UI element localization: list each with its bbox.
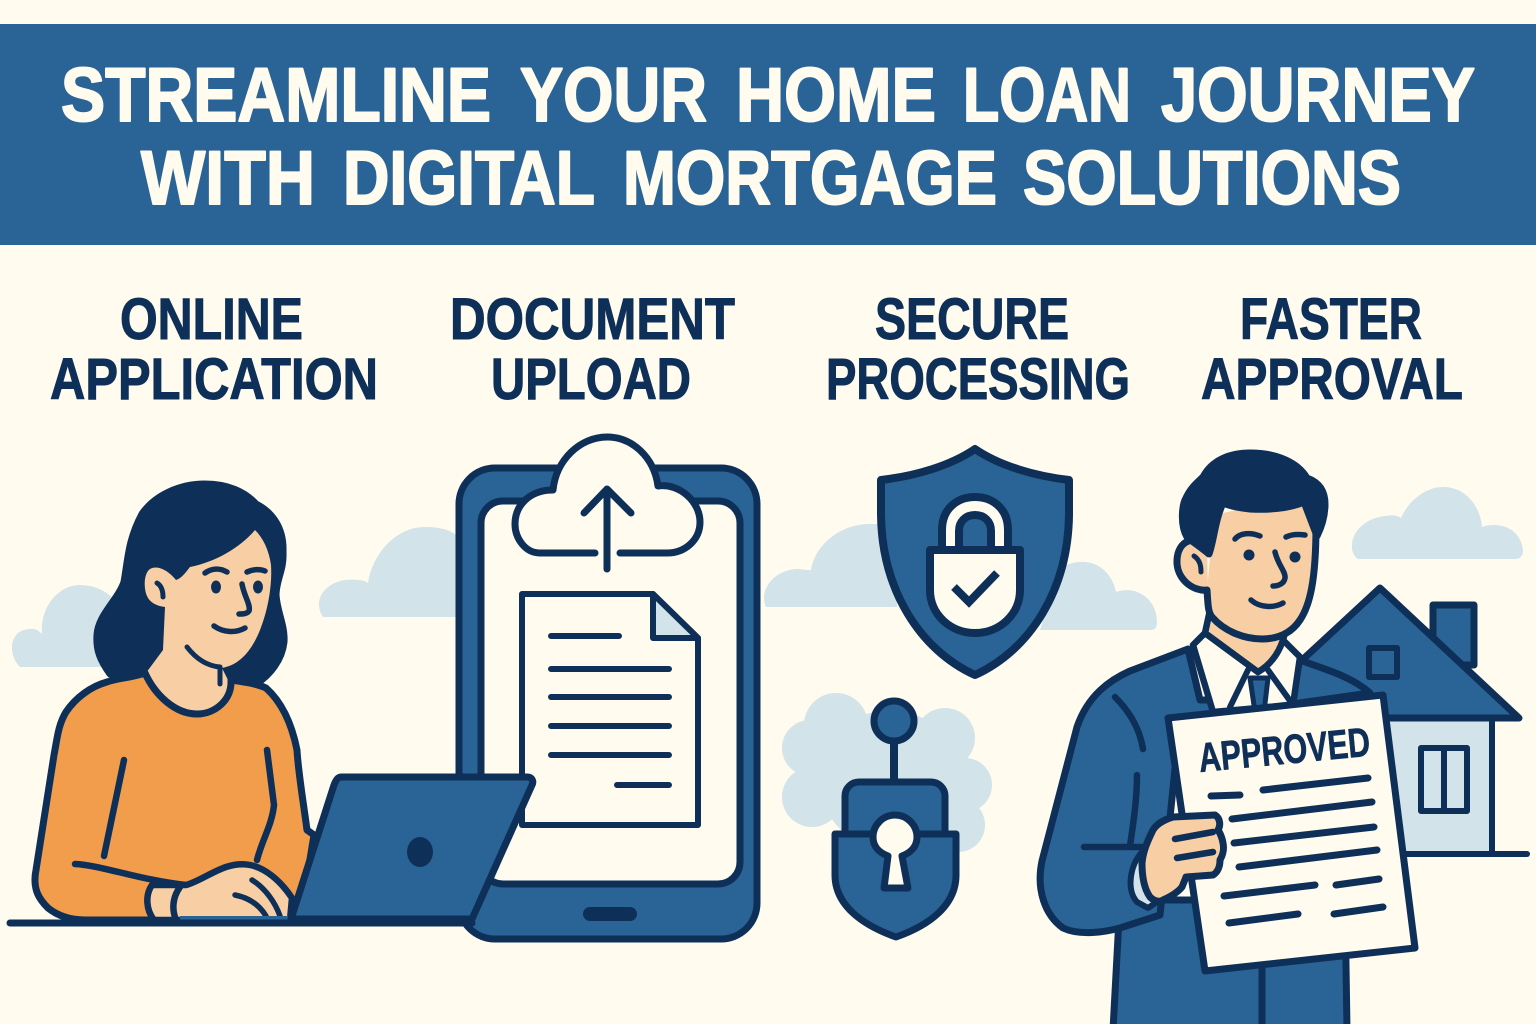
eyes (211, 580, 221, 594)
approved paper (1168, 695, 1415, 971)
facial lines (1235, 534, 1305, 606)
document (522, 594, 698, 825)
heading: faster approval: FASTER (1240, 287, 1422, 352)
cuff and hand (147, 864, 292, 920)
jaw line (187, 647, 220, 684)
heading: document upload (450, 287, 735, 412)
tablet screen (481, 501, 740, 884)
illustration: businessman with approved paper (1040, 453, 1415, 1024)
lower shield (835, 834, 956, 937)
check mark (954, 573, 997, 602)
title banner: JOURNEY (1161, 53, 1475, 138)
title banner: WITH (141, 136, 315, 221)
hair (97, 484, 284, 684)
title banner: YOUR (520, 53, 707, 138)
heading: faster approval: APPROVAL (1201, 347, 1463, 412)
face and neck (145, 530, 271, 714)
facial lines (205, 569, 265, 632)
shield (881, 449, 1069, 675)
table edge (10, 920, 472, 926)
laptop logo (407, 837, 433, 867)
heading: online application: APPLICATION (50, 347, 378, 412)
title banner: DIGITAL (343, 136, 595, 221)
roof (1300, 588, 1519, 718)
illustration: house (1300, 588, 1527, 854)
title banner: STREAMLINE (61, 53, 491, 138)
ground line (1395, 851, 1527, 857)
wall (1340, 717, 1492, 854)
heading: document upload: DOCUMENT (450, 287, 735, 352)
torso (1113, 900, 1347, 1024)
shirt collar (1193, 633, 1300, 712)
heading: secure processing (826, 287, 1130, 412)
icon: tablet with cloud upload and document (459, 437, 757, 939)
chimney (1433, 605, 1474, 665)
face fill (1207, 495, 1316, 639)
title banner (0, 24, 1536, 245)
icon: large shield with padlock (881, 449, 1069, 675)
home button (583, 907, 637, 921)
heading: document upload: UPLOAD (491, 347, 691, 412)
heading: faster approval (1201, 287, 1463, 412)
finger lines (1175, 832, 1213, 858)
face outline (1207, 525, 1316, 639)
icon: shield with keyhole (835, 701, 956, 937)
padlock body (930, 550, 1020, 633)
approved stamp text: APPROVED (1196, 719, 1372, 781)
title banner: SOLUTIONS (1023, 136, 1401, 221)
heading: secure processing: SECURE (875, 287, 1069, 352)
ear (1177, 540, 1208, 590)
eyes (1244, 550, 1254, 560)
wall window (1421, 748, 1467, 811)
tie (1250, 678, 1268, 712)
illustration: woman at laptop (10, 484, 533, 923)
heading: secure processing: PROCESSING (826, 347, 1130, 412)
title banner: HOME (736, 53, 936, 138)
hair (1182, 453, 1325, 554)
padlock shackle (942, 497, 1008, 550)
hand (1142, 815, 1224, 901)
upload arrow (584, 489, 631, 569)
paper lines (1211, 778, 1383, 923)
document fold (653, 594, 698, 638)
jacket fold lines (1084, 697, 1145, 847)
background clouds (12, 487, 1523, 852)
sweater (35, 673, 314, 920)
keyhole (873, 815, 917, 888)
cuff (1131, 852, 1160, 908)
circle top (874, 701, 914, 741)
keyboard strip (180, 916, 288, 921)
stem (890, 740, 898, 782)
torso centre line (1258, 960, 1266, 1024)
title banner: LOAN (963, 53, 1131, 138)
upper lock (845, 782, 945, 852)
attic window (1369, 648, 1397, 677)
ear line (1194, 556, 1201, 572)
jacket (1040, 649, 1370, 933)
ear line (157, 583, 163, 597)
upload cloud (515, 437, 700, 553)
tablet body (459, 468, 757, 939)
title banner: MORTGAGE (623, 136, 997, 221)
sweater fold lines (75, 750, 274, 885)
document lines (551, 636, 669, 785)
neck (1205, 610, 1290, 672)
laptop (291, 777, 533, 919)
heading: online application: ONLINE (120, 287, 303, 352)
heading: online application (50, 287, 378, 412)
